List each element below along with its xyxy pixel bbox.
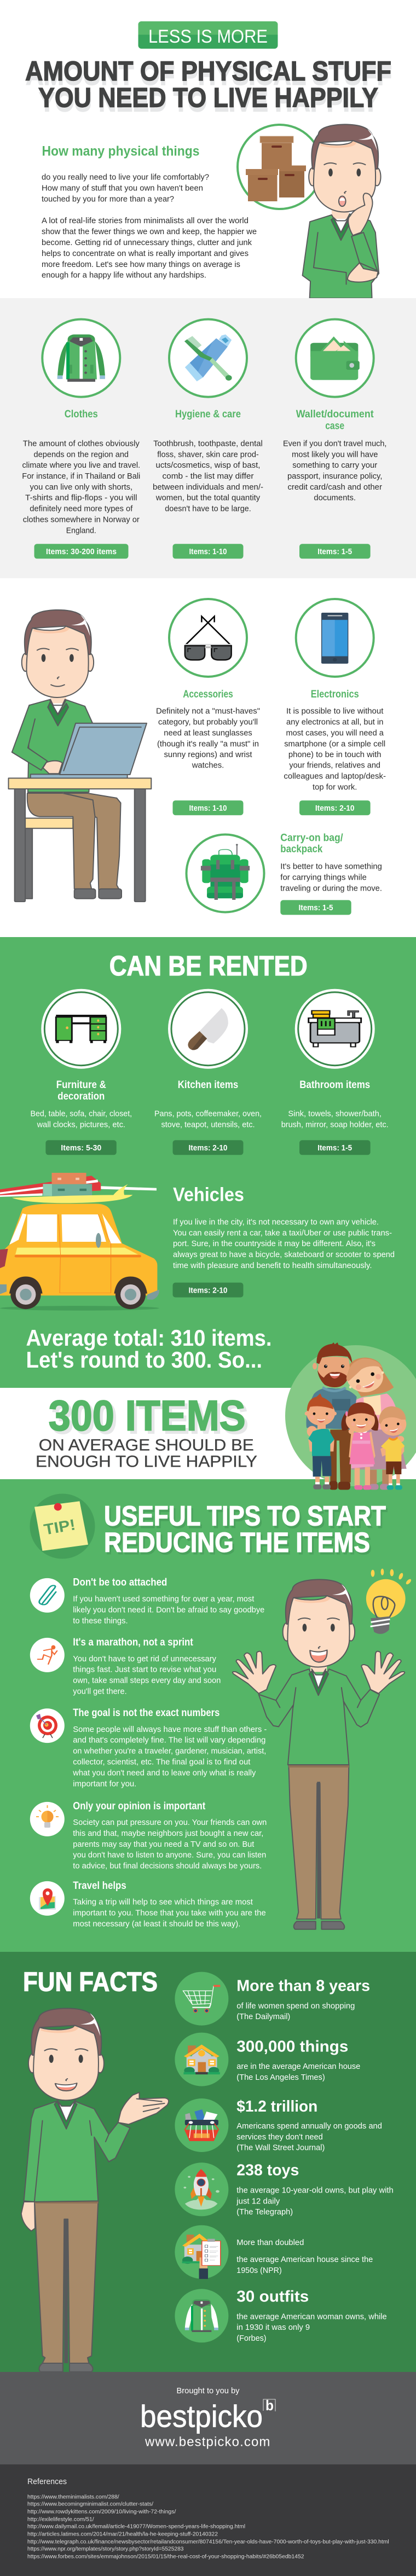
badge: electronics items: Items: 2-10 xyxy=(315,804,355,813)
text block: reference links: https://www.theminimalists.com/288/ xyxy=(27,2494,119,2500)
text block xyxy=(73,1654,221,1696)
text block: collector, scientist, etc. The final goal is to find out xyxy=(73,1758,251,1767)
text block: more than doubled: 1950s (NPR) xyxy=(236,2266,282,2275)
illustration: man at laptop xyxy=(9,610,151,902)
text block xyxy=(236,2185,394,2217)
text block: the average 10-year-old owns, but play with xyxy=(236,2185,394,2195)
text block: services they don't need xyxy=(236,2132,323,2142)
badge: kitchen items: Items: 2-10 xyxy=(188,1143,228,1153)
text block: (The Telegraph) xyxy=(236,2207,293,2217)
text block: more than doubled: the average American house since the xyxy=(236,2255,373,2264)
text block: furniture: Bed, table, sofa, chair, closet, xyxy=(31,1109,132,1119)
tip: only your opinion xyxy=(30,1801,267,1871)
heading: clothes: Clothes xyxy=(65,409,98,420)
heading: The goal is not the exact numbers xyxy=(73,1707,219,1719)
text block: Some people will always have more stuff than others - xyxy=(73,1725,267,1734)
text block: clothes: climate where you live and travel. xyxy=(22,461,140,470)
badge: accessories items xyxy=(173,800,243,815)
text block xyxy=(236,2312,387,2343)
badge: vehicle items: Items: 2-10 xyxy=(188,1286,228,1295)
text block: intro paragraph: show that the fewer things we own and keep, the happier we xyxy=(42,227,257,236)
text block: carry-on xyxy=(280,862,382,893)
text block: accessories: Definitely not a "must-haves" xyxy=(156,706,260,716)
text block: average total xyxy=(26,1325,271,1373)
badge: electronics items xyxy=(299,800,371,815)
text block: hygiene: comb - the list may differ xyxy=(162,472,254,481)
card: carry-on bag xyxy=(186,833,382,915)
text block: hygiene: doesn't have to be large. xyxy=(165,504,251,513)
fact: 30 outfits xyxy=(175,2288,387,2343)
icon: wallet xyxy=(296,319,374,397)
text block: clothes: England. xyxy=(66,526,96,535)
badge: wallet items: Items: 1-5 xyxy=(317,547,352,556)
text block: this and that, maybe neighbors just bought a new car, xyxy=(73,1829,263,1838)
text block: accessories: need at least sunglasses xyxy=(164,728,252,737)
heading: bathroom items: Bathroom items xyxy=(299,1079,370,1091)
text block: clothes: definitely need more types of xyxy=(30,504,133,513)
text block: the average American woman owns, while xyxy=(236,2312,387,2321)
badge: accessories items: Items: 1-10 xyxy=(189,804,227,813)
text block: intro paragraph xyxy=(42,216,257,280)
stat: 300,000 things xyxy=(236,2038,348,2056)
text block: enough to live happily: ON AVERAGE SHOULD BE xyxy=(39,1436,254,1454)
text block: intro paragraph: enough for a happy life without any hardships. xyxy=(42,270,206,280)
badge: carry-on items xyxy=(280,900,351,915)
text block: bathroom: Sink, towels, shower/bath, xyxy=(288,1109,382,1119)
text block: vehicles: port. Sure, in the countryside it may be different. Also, it's xyxy=(173,1239,375,1248)
text block: accessories xyxy=(156,706,260,770)
text block: clothes: T-shirts and flip-flops - you will xyxy=(25,493,137,503)
logo: bestpicko: bestpicko xyxy=(140,2399,263,2434)
icon: boxes in circle xyxy=(238,125,322,209)
heading: wallet/document case: Wallet/document xyxy=(296,409,374,420)
icon: house with checklist xyxy=(175,2225,228,2279)
text block: kitchen xyxy=(154,1109,262,1130)
text block: electronics: colleagues and laptop/desk- xyxy=(284,772,386,781)
text block: (The Los Angeles Times) xyxy=(236,2073,325,2082)
heading: Only your opinion is important xyxy=(73,1801,206,1812)
text block: in 1930 it was only 9 xyxy=(236,2323,310,2332)
panel: essential items grey band xyxy=(0,298,416,578)
icon: sunglasses xyxy=(169,599,247,677)
icon: backpack xyxy=(186,835,264,912)
illustration: car with luggage xyxy=(0,1173,159,1311)
card: clothes xyxy=(22,319,140,559)
text block: reference links: http://articles.latimes.com/2014/mar/21/health/la-he-keeping-stuff-20140322 xyxy=(27,2531,218,2537)
text block: kitchen: stove, teapot, utensils, etc. xyxy=(161,1120,255,1130)
badge: carry-on items: Items: 1-5 xyxy=(299,903,333,912)
fact: more than 8 years xyxy=(175,1972,370,2026)
badge: less is more: LESS IS MORE xyxy=(148,26,268,47)
heading: useful tips xyxy=(104,1501,388,1560)
icon: map pin xyxy=(30,1881,65,1916)
text block: intro question: do you really need to live your life comfortably? xyxy=(42,173,209,182)
card: furniture xyxy=(31,989,132,1155)
text block: hygiene: Toothbrush, toothpaste, dental xyxy=(153,439,263,449)
panel: 300 items callout xyxy=(0,1388,416,1479)
title: YOU NEED TO LIVE HAPPILY xyxy=(39,86,379,117)
text block: electronics xyxy=(284,706,386,792)
heading: useful tips: REDUCING THE ITEMS xyxy=(104,1527,370,1558)
heading: carry-on bag/backpack xyxy=(280,833,343,855)
stat: More than 8 years xyxy=(236,1977,370,1994)
text block: average total: Let's round to 300. So... xyxy=(26,1347,262,1373)
heading: Travel helps xyxy=(73,1880,126,1892)
badge: clothes items xyxy=(34,544,128,559)
text block: electronics: top for work. xyxy=(313,783,357,792)
text block: electronics: any electronics at all, but in xyxy=(286,717,383,726)
icon: target xyxy=(30,1708,65,1743)
panel: sponsor footer xyxy=(0,2372,416,2464)
text block: more than doubled: More than doubled xyxy=(236,2238,304,2247)
text block: reference links xyxy=(27,2494,389,2560)
text block: reference links: https://www.forbes.com/sites/emmajohnson/2015/01/15/the-real-cost-of-your-shopping-habits/#26b05edb1452 xyxy=(27,2554,304,2560)
heading: carry-on bag/backpack: backpack xyxy=(280,844,323,855)
text block: more than doubled xyxy=(236,2238,373,2275)
tip: don't be too attached xyxy=(30,1577,264,1626)
text block: hygiene: between individuals and men/- xyxy=(153,482,263,492)
text block: wallet: Even if you don't travel much, xyxy=(283,439,386,449)
badge: hygiene items: Items: 1-10 xyxy=(189,547,227,556)
text: website: www.bestpicko.com xyxy=(145,2435,270,2450)
text block: (The Dailymail) xyxy=(236,2012,290,2021)
icon: shopping cart xyxy=(175,1972,228,2026)
badge: vehicle items xyxy=(173,1283,243,1298)
badge: bathroom items: Items: 1-5 xyxy=(317,1143,352,1153)
text block: to these things. xyxy=(73,1616,128,1626)
icon: bathroom tub xyxy=(295,989,375,1069)
heading: hygiene and care: Hygiene & care xyxy=(175,409,241,420)
illustration: thinking man xyxy=(303,124,381,298)
text block: intro paragraph: A lot of real-life stories from minimalists all over the world xyxy=(42,216,249,225)
badge: kitchen items xyxy=(173,1140,243,1155)
stat: 30 outfits xyxy=(236,2288,309,2305)
text block: carry-on: It's better to have something xyxy=(280,862,382,871)
text block: intro question: How many of stuff that you own haven't been xyxy=(42,184,203,193)
text block: parents may say that you need a TV and so on. But xyxy=(73,1840,255,1849)
big number: 300 items: 300 ITEMS xyxy=(49,1392,246,1440)
text block: accessories: category, but probably you'll xyxy=(158,717,258,726)
text block: (Forbes) xyxy=(236,2334,267,2343)
badge: furniture items xyxy=(45,1140,117,1155)
card: wallet and documents xyxy=(283,319,386,559)
fact: $1.2 trillion xyxy=(175,2098,382,2153)
text block: furniture xyxy=(31,1109,132,1130)
icon: tip note: TIP! xyxy=(43,1516,77,1538)
text block: on whether you're a traveler, gardener, musician, artist, xyxy=(73,1747,266,1756)
text block: important for you. xyxy=(73,1779,136,1788)
text block: reference links: https://www.npr.org/templates/story/story.php?storyId=5525283 xyxy=(27,2546,184,2552)
text block: electronics: your friends, relatives and xyxy=(289,761,380,770)
icon: knife xyxy=(168,989,248,1069)
panel: can be rented xyxy=(0,937,416,1952)
icon: desk xyxy=(41,989,121,1069)
panel: fun facts xyxy=(0,1952,416,2372)
heading: kitchen items: Kitchen items xyxy=(178,1079,238,1091)
text block: wallet: passport, insurance policy, xyxy=(287,472,382,481)
stat: 238 toys xyxy=(236,2162,299,2179)
badge: wallet items xyxy=(299,544,371,559)
text block: reference links: http://www.rowdykittens.com/2009/10/living-with-72-things/ xyxy=(27,2509,176,2515)
text block: reference links: https://www.becomingminimalist.com/clutter-stats/ xyxy=(27,2502,153,2508)
fact: 300,000 things xyxy=(175,2033,360,2086)
icon: rocket xyxy=(175,2162,228,2216)
logo: bestpicko: b xyxy=(265,2397,274,2414)
text block: intro question xyxy=(42,173,209,203)
heading: furniture and decoration xyxy=(56,1079,106,1102)
heading: It's a marathon, not a sprint xyxy=(73,1637,193,1648)
text block xyxy=(236,2001,355,2021)
text block: hygiene: women, but the total quantity xyxy=(155,493,261,503)
badge: hygiene items xyxy=(173,544,243,559)
text block: you'll get there. xyxy=(73,1687,127,1696)
text block xyxy=(73,1594,264,1626)
text block: You don't have to get rid of unnecessary xyxy=(73,1654,216,1664)
text block: hygiene xyxy=(153,439,263,513)
heading: fun facts: FUN FACTS xyxy=(23,1967,158,1997)
fact: 238 toys xyxy=(175,2162,394,2217)
stat: $1.2 trillion xyxy=(236,2098,317,2115)
badge: furniture items: Items: 5-30 xyxy=(61,1143,101,1153)
text block: accessories: sunny regions) and wrist xyxy=(164,750,252,759)
fact: more than doubled xyxy=(175,2225,373,2279)
heading: references: References xyxy=(27,2477,67,2486)
badge: less is more xyxy=(138,21,278,49)
text block: wallet xyxy=(283,439,386,503)
text block: vehicles: time with pleasure and benefit to health simultaneously. xyxy=(173,1261,372,1270)
heading: wallet/document case: case xyxy=(325,421,344,432)
text block: intro paragraph: helps to concentrate on what is really important and gives xyxy=(42,249,249,258)
text block: enough to live happily xyxy=(36,1436,257,1470)
title xyxy=(25,56,392,117)
text block: most necessary (at least it should be this way). xyxy=(73,1919,240,1928)
card: accessories xyxy=(156,599,260,815)
card: kitchen xyxy=(154,989,262,1155)
text block: clothes xyxy=(22,439,140,535)
icon: shopping basket xyxy=(175,2098,228,2152)
text block: wallet: credit card/cash and other xyxy=(287,482,382,492)
badge: bathroom items xyxy=(299,1140,371,1155)
text block: wallet: something to carry your xyxy=(292,461,377,470)
text block: electronics: most cases, you will need a xyxy=(286,728,384,737)
illustration: family xyxy=(285,1342,416,1490)
text block: clothes: The amount of clothes obviously xyxy=(23,439,140,449)
text block: things fast. Just start to revise what you xyxy=(73,1665,216,1674)
icon: smartphone xyxy=(296,599,374,677)
icon: light bulb xyxy=(30,1802,65,1836)
text block: Society can put pressure on you. Your friends can own xyxy=(73,1818,267,1827)
text block: you don't have to listen to anyone. Sure, you can listen xyxy=(73,1851,266,1860)
heading: how many physical things: How many physical things xyxy=(42,143,199,159)
panel: references xyxy=(0,2464,416,2576)
text block: important to you. Those that you take with you are the xyxy=(73,1908,266,1917)
panel: intro header xyxy=(25,21,392,117)
icon: paperclip xyxy=(30,1578,65,1613)
badge: clothes items: Items: 30-200 items xyxy=(46,547,117,556)
heading: can be rented: CAN BE RENTED xyxy=(109,950,308,981)
card: bathroom xyxy=(281,989,389,1155)
text block: clothes: clothes somewhere in Norway or xyxy=(23,515,140,524)
card: hygiene and care xyxy=(153,319,263,559)
heading: useful tips: REDUCING THE ITEMS xyxy=(106,1529,372,1560)
tip: exact numbers xyxy=(30,1707,267,1788)
text block xyxy=(73,1818,267,1871)
text block: vehicles: always great to have a bicycle, skateboard or scooter to spend xyxy=(173,1250,395,1259)
tip: travel helps xyxy=(30,1880,266,1928)
text block: If you haven't used something for over a year, most xyxy=(73,1594,255,1604)
text block: average total: Average total: 310 items. xyxy=(26,1325,271,1351)
text block: bathroom xyxy=(281,1109,389,1130)
text block: of life women spend on shopping xyxy=(236,2001,355,2010)
text block: to advice, but final decisions should always be yours. xyxy=(73,1862,262,1871)
text block: wallet: most likely you will have xyxy=(292,450,378,460)
heading: vehicles: Vehicles xyxy=(173,1184,244,1206)
text block: Taking a trip will help to see which things are most xyxy=(73,1897,253,1906)
text block: reference links: http://www.dailymail.co.uk/femail/article-419077/Women-spend-years-life-shopping.html xyxy=(27,2524,245,2530)
text block: intro paragraph: more freedom. Let's see how many things on average is xyxy=(42,260,240,269)
text block: furniture: wall clocks, pictures, etc. xyxy=(37,1120,125,1130)
text block: carry-on: traveling or during the move. xyxy=(280,884,382,893)
tip: marathon xyxy=(30,1637,221,1696)
text block: intro question: touched by you for more than a year? xyxy=(42,195,174,203)
heading: wallet/document case xyxy=(296,409,374,432)
title: YOU NEED TO LIVE HAPPILY xyxy=(38,82,378,113)
text block: accessories: watches. xyxy=(192,761,224,770)
text: brought to you by: Brought to you by xyxy=(176,2386,240,2395)
icon: toothpaste and toothbrush xyxy=(169,319,247,397)
icon: jacket xyxy=(175,2289,228,2342)
text block: (The Wall Street Journal) xyxy=(236,2143,325,2153)
text block: reference links: http://exilelifestyle.com/51/ xyxy=(27,2516,94,2522)
text block: vehicles: You can easily rent a car, take a taxi/Uber or use public trans- xyxy=(173,1229,392,1238)
text block: own, take small steps every day and soon xyxy=(73,1676,221,1685)
text block: Americans spend annually on goods and xyxy=(236,2121,382,2131)
text block: vehicles: If you live in the city, it's not necessary to own any vehicle. xyxy=(173,1218,379,1227)
text block: electronics: phone) to be in touch with xyxy=(288,750,381,759)
icon: house xyxy=(175,2033,228,2086)
text block: wallet: documents. xyxy=(314,493,356,503)
text block: hygiene: floss, shaver, skin care prod- xyxy=(157,450,259,460)
text block: intro paragraph: become. Getting rid of unnecessary things, clutter and junk xyxy=(42,238,252,247)
text block: just 12 daily xyxy=(236,2196,280,2206)
text block: enough to live happily: ENOUGH TO LIVE HAPPILY xyxy=(36,1452,257,1470)
text block xyxy=(236,2062,360,2082)
text block: and that's completely fine. The list will vary depending xyxy=(73,1736,265,1745)
text block: hygiene: ucts/cosmetics, wisp of bast, xyxy=(155,461,261,470)
heading: furniture and decoration: Furniture & xyxy=(56,1079,106,1091)
icon: tip note xyxy=(30,1493,95,1559)
text block xyxy=(236,2121,382,2153)
card: electronics xyxy=(284,599,386,815)
text block: bathroom: brush, mirror, soap holder, etc. xyxy=(281,1120,389,1130)
heading: Don't be too attached xyxy=(73,1577,167,1589)
text block: kitchen: Pans, pots, coffeemaker, oven, xyxy=(154,1109,262,1119)
illustration: happy man with raised hands and bulb xyxy=(233,1568,412,1929)
text block xyxy=(72,1725,267,1788)
heading: electronics: Electronics xyxy=(311,689,359,700)
text block: electronics: smartphone (or a simple cell xyxy=(284,739,385,748)
text block: what you don't need and to leave only what is really xyxy=(72,1769,256,1778)
icon: jacket xyxy=(42,319,120,397)
text block: clothes: you can live only with shorts, xyxy=(30,482,132,492)
text block: clothes: For instance, if in Thailand or Bali xyxy=(22,472,140,481)
text block xyxy=(73,1897,266,1928)
text block: clothes: depends on the region and xyxy=(34,450,129,460)
heading: furniture and decoration: decoration xyxy=(57,1091,105,1102)
heading: accessories: Accessories xyxy=(183,689,233,700)
heading: carry-on bag/backpack: Carry-on bag/ xyxy=(280,833,343,844)
text block: reference links: http://www.telegraph.co.uk/finance/newsbysector/retailandconsumer/8074156/Ten-year-olds-have-7000-worth-of-toys-but-play-with-just-330.html xyxy=(27,2539,389,2545)
text block: are in the average American house xyxy=(236,2062,360,2071)
text block: likely you don't need it. Don't be afraid to say goodbye xyxy=(73,1605,264,1615)
text block: electronics: It is possible to live without xyxy=(286,706,384,716)
big number: 300 items: 300 ITEMS xyxy=(51,1394,249,1443)
text block: carry-on: for carrying things while xyxy=(280,873,367,882)
illustration: presenting man xyxy=(21,2008,169,2372)
icon: runner xyxy=(30,1638,65,1672)
text block: accessories: (though it's really "a must" in xyxy=(157,739,259,748)
text block: vehicles xyxy=(173,1218,395,1270)
